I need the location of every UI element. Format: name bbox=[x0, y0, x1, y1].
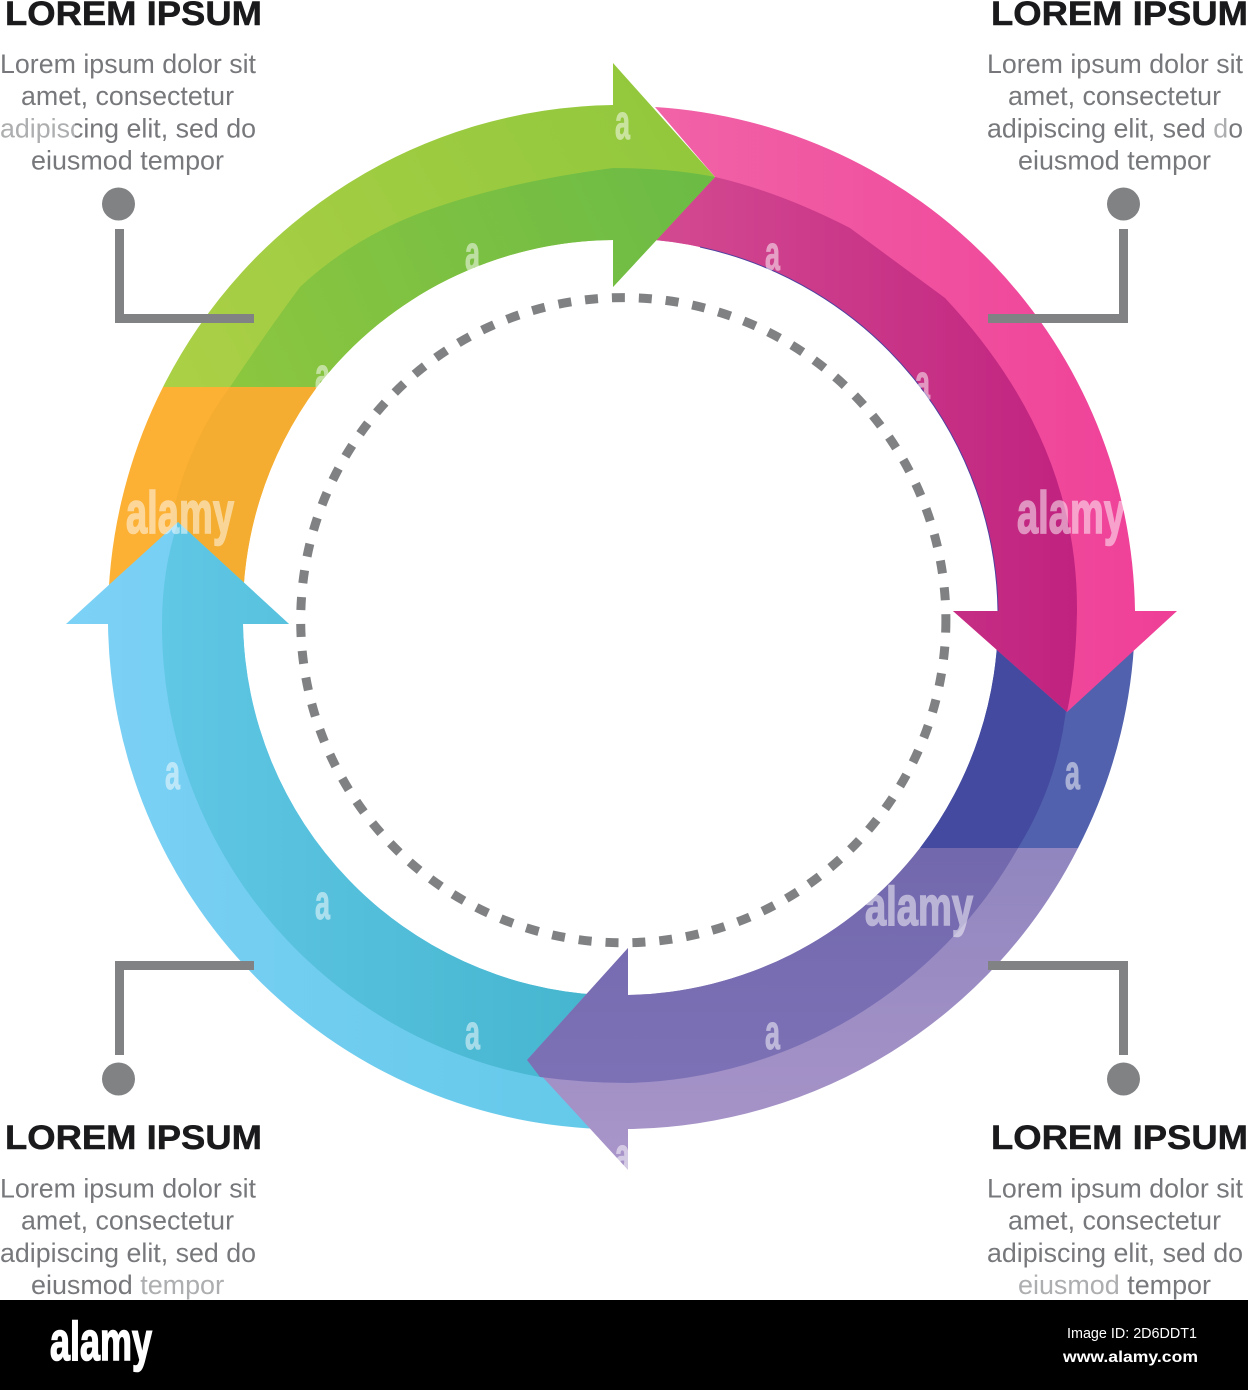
arrow: light blue, pointing up bbox=[66, 522, 600, 1129]
dotted inner circle bbox=[301, 298, 946, 943]
text block: top left: adipiscing elit, sed do bbox=[0, 114, 256, 144]
watermark marks: a bbox=[315, 349, 330, 403]
text block: bottom right: amet, consectetur bbox=[1008, 1206, 1221, 1236]
connector: top left bbox=[102, 188, 254, 318]
text block: top right: amet, consectetur bbox=[1008, 81, 1221, 111]
text block: top right: eiusmod tempor bbox=[1018, 146, 1211, 176]
watermark marks: a bbox=[1065, 746, 1080, 800]
watermark marks: a bbox=[765, 227, 780, 281]
watermark marks: alamy bbox=[1017, 480, 1125, 546]
footer url: www.alamy.com bbox=[1062, 1349, 1198, 1366]
text block: bottom left: adipiscing elit, sed do bbox=[0, 1238, 256, 1268]
text block: bottom left: eiusmod tempor bbox=[31, 1270, 224, 1300]
text block: top right: Lorem ipsum dolor sit bbox=[987, 49, 1243, 79]
text block: bottom left: Lorem ipsum dolor sit bbox=[0, 1174, 256, 1204]
watermark marks: a bbox=[465, 227, 480, 281]
connector: bottom right bbox=[988, 966, 1140, 1096]
connector: bottom left bbox=[102, 966, 254, 1096]
text block: bottom right: adipiscing elit, sed do bbox=[987, 1238, 1243, 1268]
footer logo: alamy bbox=[50, 1310, 152, 1372]
watermark marks: a bbox=[465, 1006, 480, 1060]
orange ring segment bbox=[108, 387, 317, 624]
text block: bottom right: Lorem ipsum dolor sit bbox=[987, 1174, 1243, 1204]
text block: bottom left bbox=[0, 1119, 262, 1300]
text block: top left: amet, consectetur bbox=[21, 81, 234, 111]
footer image id: Image ID: 2D6DDT1 bbox=[1067, 1325, 1197, 1342]
arrow: purple, pointing left bbox=[527, 848, 1078, 1170]
watermark marks: a bbox=[165, 746, 180, 800]
text block: top right bbox=[987, 0, 1248, 176]
watermark marks: a bbox=[615, 1129, 630, 1183]
watermark marks: a bbox=[615, 96, 630, 150]
text block: bottom right bbox=[987, 1119, 1248, 1300]
watermark marks: alamy bbox=[865, 875, 973, 937]
text block: top left bbox=[0, 0, 262, 176]
connector: top right bbox=[988, 188, 1140, 318]
watermark marks bbox=[126, 96, 1125, 1183]
text block: bottom right: LOREM IPSUM bbox=[991, 1119, 1248, 1157]
watermark marks: a bbox=[915, 356, 930, 410]
arrow: pink, pointing down bbox=[655, 107, 1177, 712]
text block: bottom right: eiusmod tempor bbox=[1018, 1270, 1211, 1300]
text block: top left: Lorem ipsum dolor sit bbox=[0, 49, 256, 79]
text block: bottom left: LOREM IPSUM bbox=[5, 1119, 262, 1157]
text block: bottom left: amet, consectetur bbox=[21, 1206, 234, 1236]
footer bar bbox=[0, 1300, 1248, 1390]
watermark marks: a bbox=[315, 876, 330, 930]
dark blue ring segment bbox=[920, 611, 1135, 848]
watermark marks: a bbox=[765, 1006, 780, 1060]
text block: top right: adipiscing elit, sed do bbox=[987, 114, 1243, 144]
arrow: green, pointing right bbox=[163, 63, 715, 387]
text block: top left: eiusmod tempor bbox=[31, 146, 224, 176]
watermark marks: alamy bbox=[126, 480, 234, 546]
